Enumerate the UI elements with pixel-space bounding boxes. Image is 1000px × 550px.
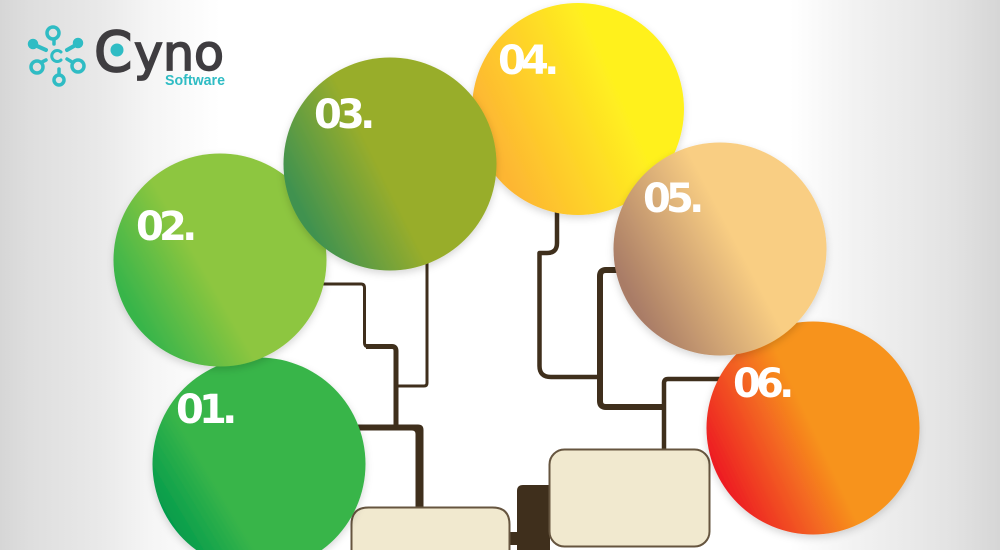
box: lower left <box>352 508 510 550</box>
circle 05: 05. <box>643 176 701 222</box>
logo icon <box>30 27 84 85</box>
circle 04: 04. <box>498 38 556 84</box>
circle 03 <box>284 58 496 270</box>
logo dot <box>110 44 124 56</box>
circle 02 <box>114 154 326 366</box>
connector: circle 01 <box>358 424 424 508</box>
connector: circle 04 <box>540 212 600 377</box>
circle 05 <box>614 142 826 356</box>
logo subtitle: Software <box>165 73 225 89</box>
logo wordmark: yno <box>134 25 224 82</box>
connector: circle 06 <box>664 379 722 450</box>
circle 04 <box>472 3 684 215</box>
connector: circle 02 <box>322 284 396 428</box>
circle 02: 02. <box>136 204 194 250</box>
connector: circle 05 <box>600 270 664 407</box>
circle 01 <box>152 357 366 550</box>
connector: boxes link <box>509 532 520 545</box>
connector lines <box>322 212 722 538</box>
logo wordmark: C <box>94 20 132 84</box>
circle 06: 06. <box>733 361 791 407</box>
circle 06 <box>706 322 920 534</box>
circle 01: 01. <box>176 387 234 433</box>
dark block between boxes <box>517 485 550 550</box>
box: upper right <box>550 450 710 546</box>
circle 03: 03. <box>314 92 372 138</box>
connector: circle 03 <box>398 262 427 386</box>
logo <box>30 20 225 89</box>
